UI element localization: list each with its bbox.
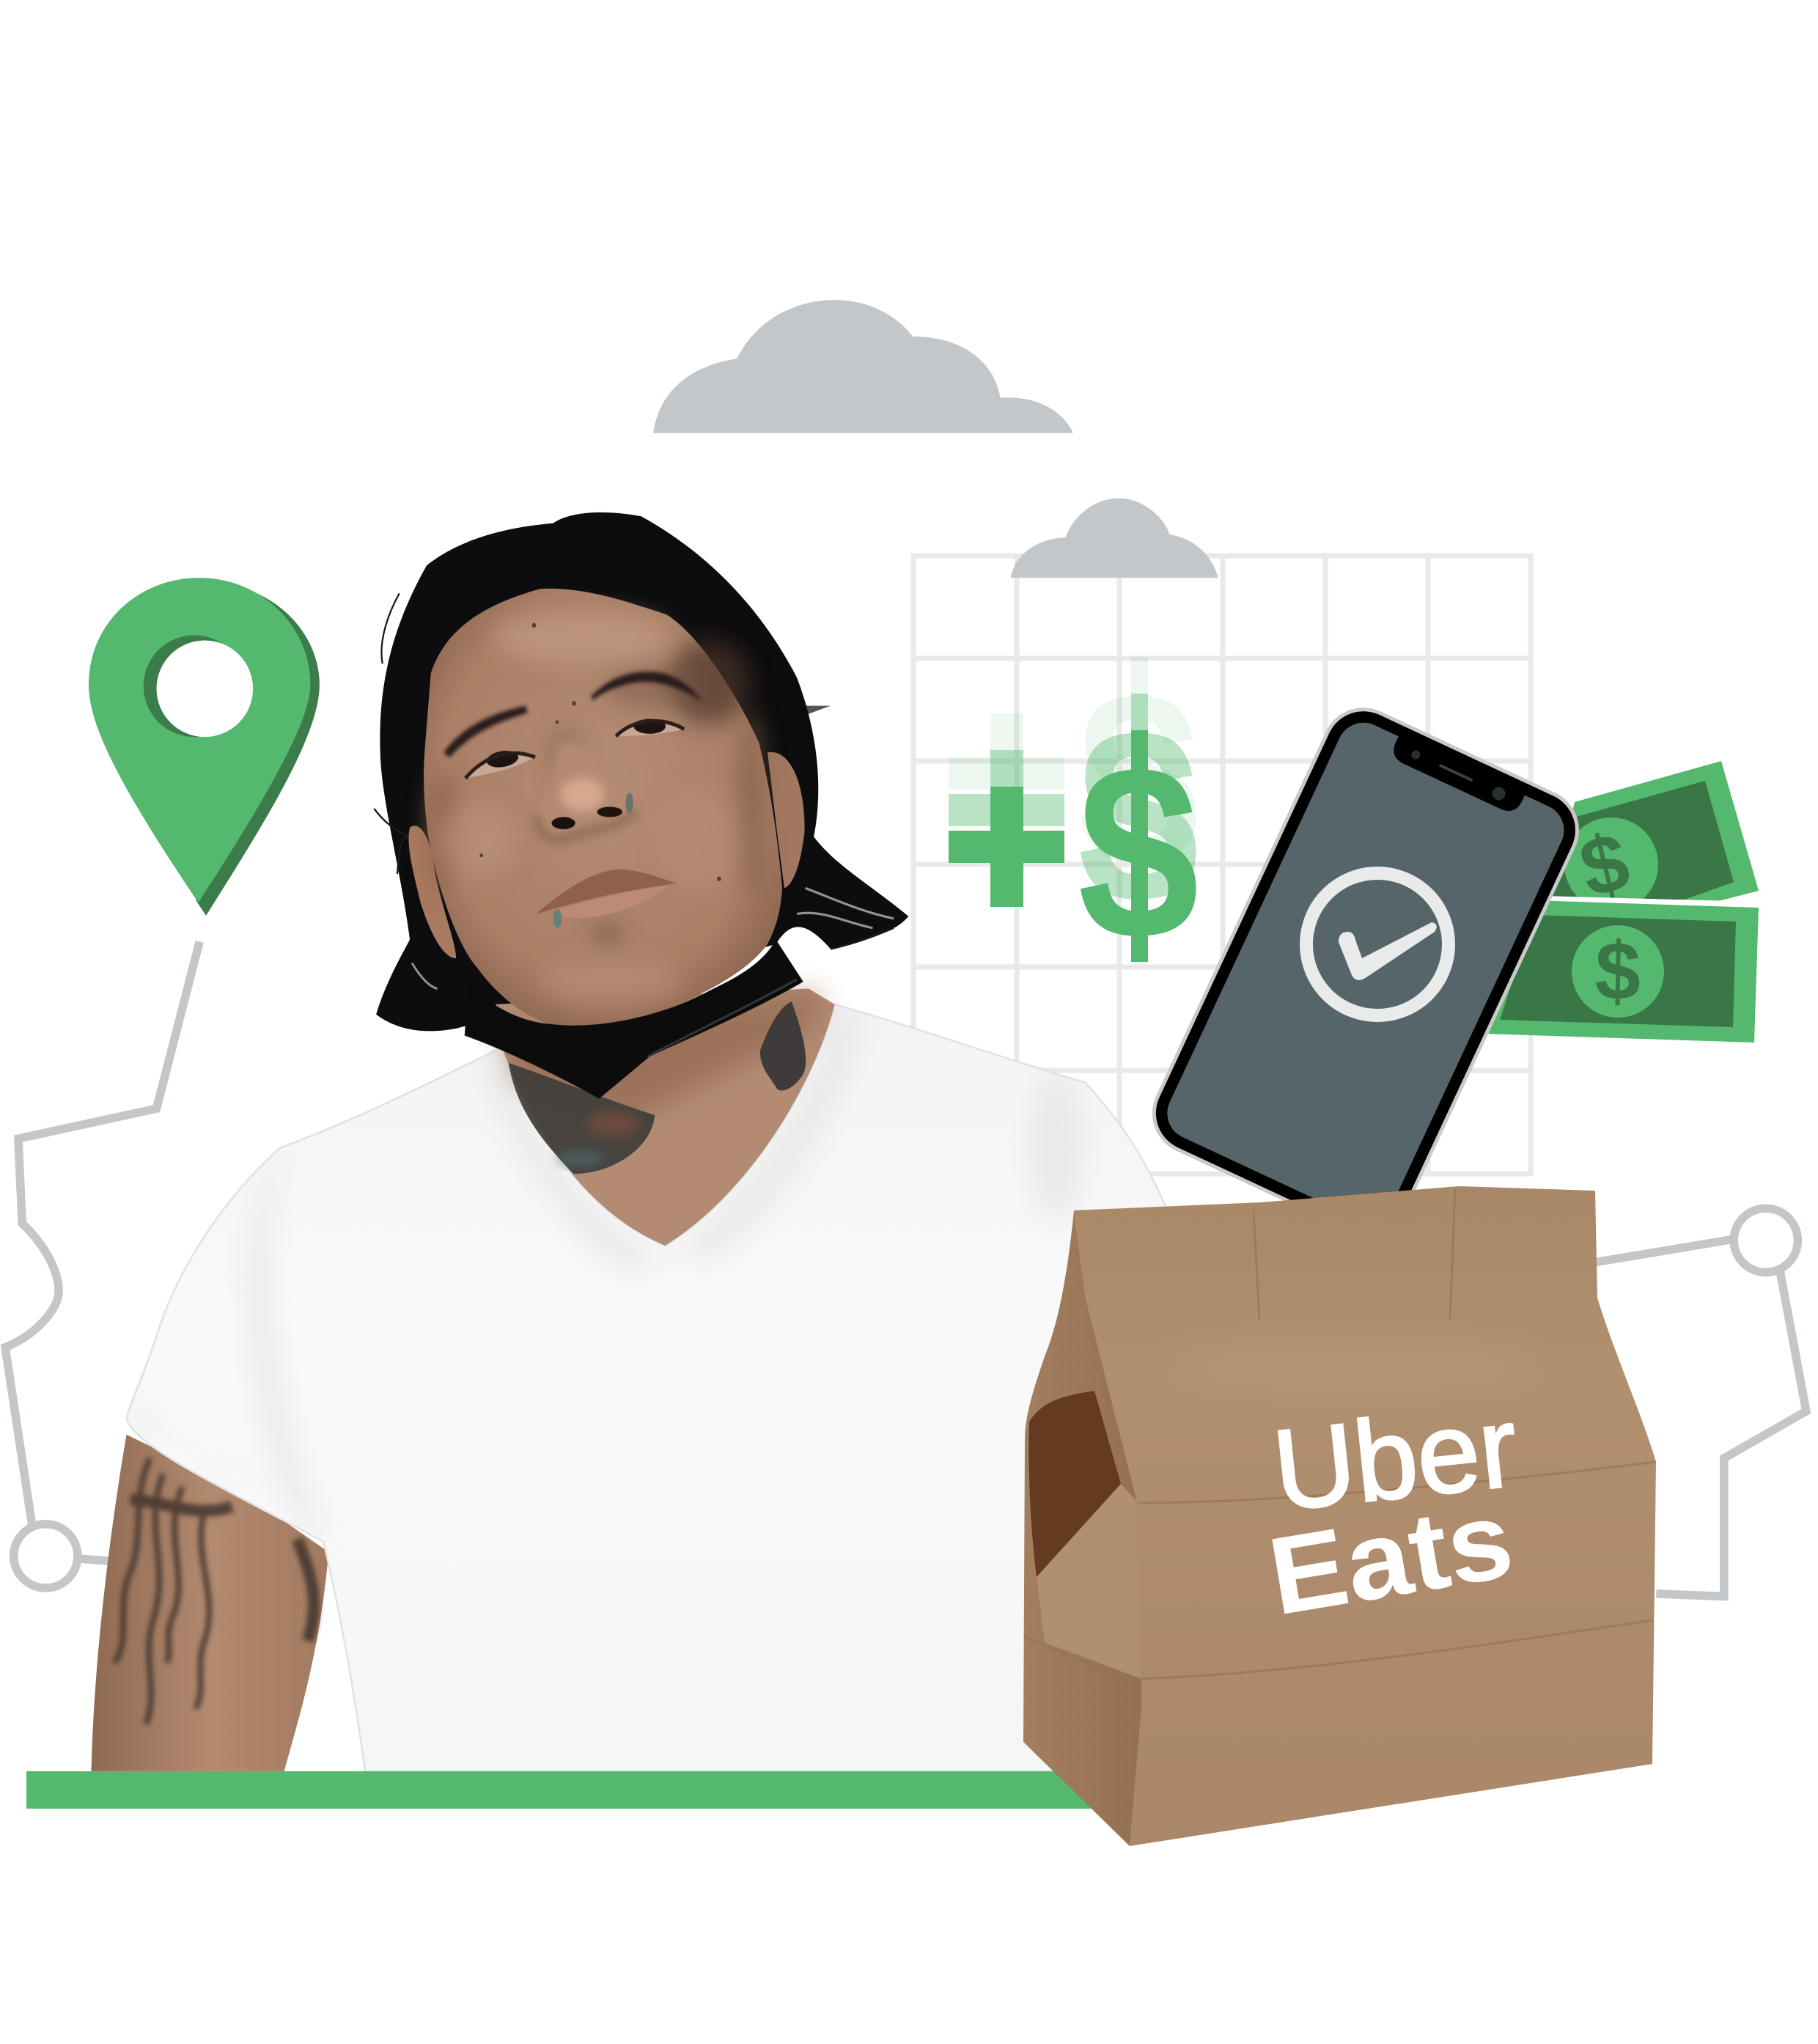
eyes bbox=[465, 718, 684, 779]
bag front bbox=[1074, 1186, 1656, 1846]
tattooed arm bbox=[92, 1435, 328, 1771]
white t-shirt bbox=[127, 1004, 1174, 1771]
bag highlights bbox=[1166, 1334, 1547, 1393]
head bbox=[409, 589, 805, 1099]
eyebrows bbox=[444, 672, 702, 757]
bag inner shadow bbox=[1028, 1391, 1121, 1577]
left route line bbox=[5, 941, 199, 1588]
face bbox=[424, 589, 782, 1026]
Uber Eats paper bag bbox=[1023, 1186, 1656, 1846]
dollar sign with fading echoes: $ bbox=[1078, 640, 1199, 918]
right ear bbox=[768, 752, 805, 888]
right route line bbox=[1594, 1208, 1806, 1596]
plus sign with fading echoes bbox=[949, 713, 1064, 907]
person bbox=[92, 512, 1174, 1771]
small cloud bbox=[1011, 499, 1218, 578]
face shading bbox=[427, 612, 765, 1005]
phone body bbox=[1141, 696, 1590, 1247]
left ear bbox=[409, 826, 456, 958]
upper banknote bbox=[1547, 761, 1759, 916]
banknotes bbox=[1485, 761, 1759, 1043]
bag side gusset bbox=[1023, 1210, 1144, 1846]
Uber Eats logo bbox=[1261, 1383, 1523, 1639]
face mask bbox=[465, 940, 803, 1099]
large cloud bbox=[653, 300, 1073, 433]
illustration: delivery worker with Uber Eats bag bbox=[0, 300, 1811, 1846]
back hair bbox=[374, 512, 908, 1031]
background grid bbox=[913, 556, 1531, 1174]
dollar sign with fading echoes: $ bbox=[1078, 677, 1199, 955]
check mark badge bbox=[1306, 873, 1449, 1015]
nose bbox=[538, 740, 636, 842]
bag lower flap bbox=[1037, 1484, 1141, 1679]
lower banknote bbox=[1485, 896, 1759, 1043]
lower banknote: $ bbox=[1594, 924, 1641, 1018]
Uber Eats logo: Uber bbox=[1267, 1383, 1523, 1535]
mouth bbox=[536, 870, 677, 928]
upper banknote: $ bbox=[1571, 815, 1638, 915]
green ground bar bbox=[26, 1771, 1104, 1809]
neck tattoo left bbox=[509, 1063, 655, 1174]
smartphone with check mark bbox=[1141, 696, 1590, 1247]
bag creases bbox=[1024, 1189, 1656, 1686]
Uber Eats logo: Eats bbox=[1261, 1477, 1521, 1639]
map pin icon bbox=[89, 578, 320, 916]
hair strands and gaps bbox=[374, 594, 894, 989]
freckles bbox=[479, 623, 721, 881]
dollar sign with fading echoes: $ bbox=[1078, 713, 1199, 991]
neck tattoo right bbox=[760, 1001, 806, 1090]
neck with tattoos bbox=[496, 988, 835, 1246]
